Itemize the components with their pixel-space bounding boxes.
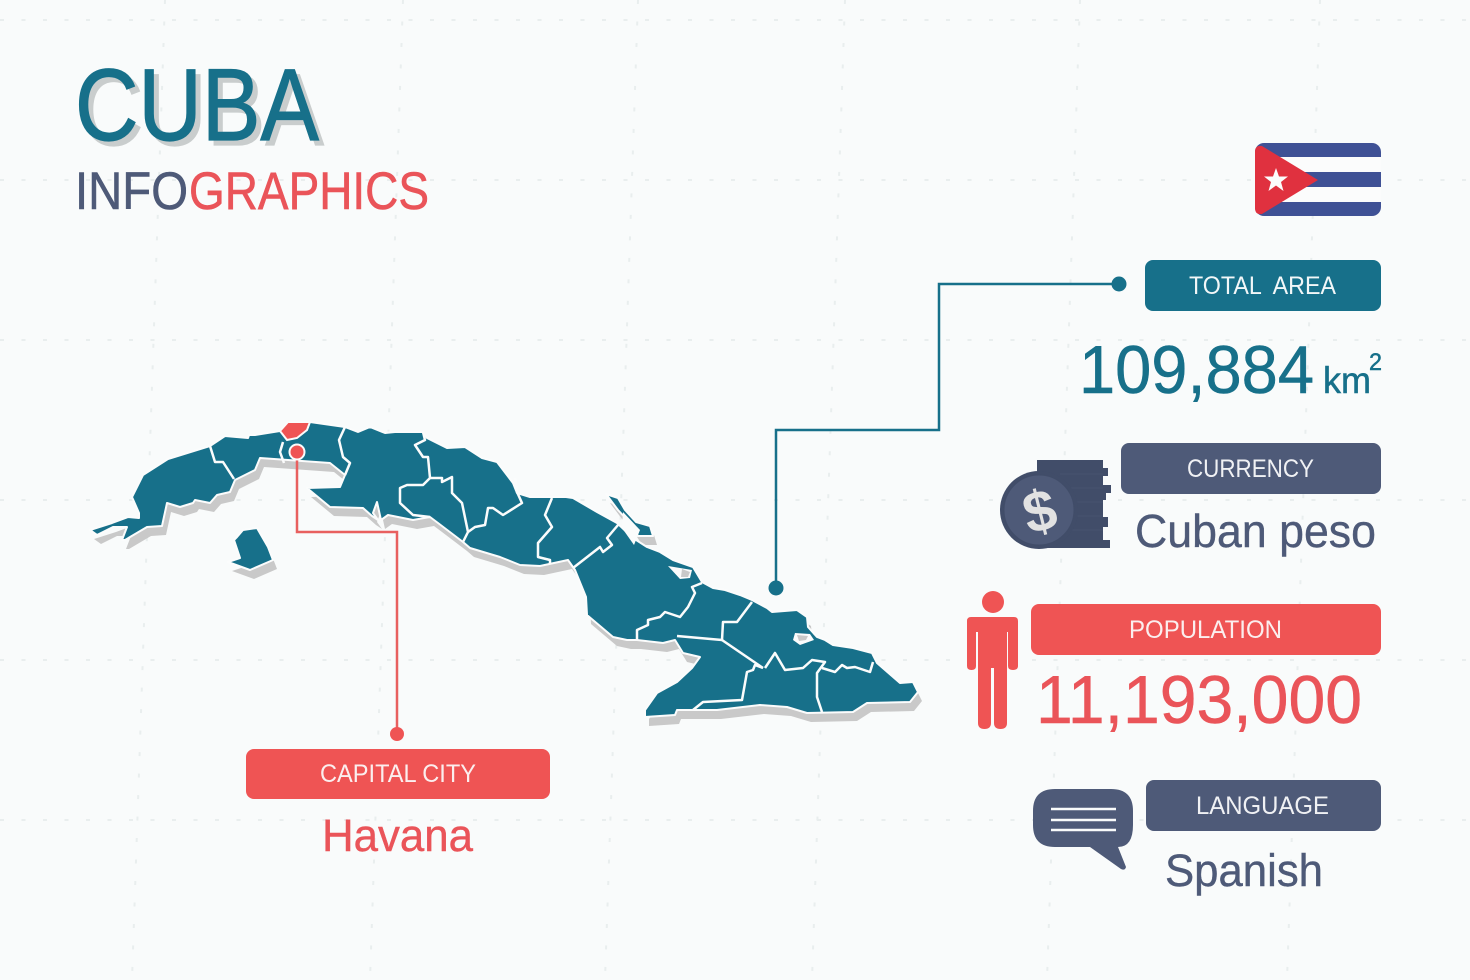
connector: capital city: [290, 444, 404, 741]
bays and coastal cut-outs: [622, 512, 814, 645]
value: total area: km: [1323, 360, 1371, 401]
connector: total area: [768, 276, 1126, 596]
label: currency: CURRENCY: [1187, 455, 1314, 483]
label: capital city: [246, 749, 550, 799]
value: population: 11,193,000: [1036, 662, 1362, 738]
map shadow: [94, 431, 922, 726]
label: currency: [1121, 443, 1381, 494]
icon: coins: [1000, 460, 1111, 549]
title: CUBA: CUBA: [80, 53, 324, 167]
map land: [90, 422, 918, 717]
value: Havana: Havana: [322, 810, 474, 861]
value: total area: 109,884: [1079, 332, 1314, 408]
province borders: [210, 427, 873, 712]
label: language: [1146, 780, 1381, 831]
label: total area: [1145, 260, 1381, 311]
icon: speech bubble: [1033, 789, 1133, 870]
title: CUBA: CUBA: [75, 48, 319, 162]
label: total area: TOTAL AREA: [1189, 272, 1336, 300]
icon: Cuban flag: [1255, 143, 1381, 216]
value: Cuban peso: Cuban peso: [1135, 505, 1376, 557]
icon: coins: $: [1016, 476, 1063, 547]
map of Cuba: [90, 422, 922, 726]
value: total area: 2: [1369, 349, 1382, 376]
label: population: [1031, 604, 1381, 655]
subtitle: INFOGRAPHICS: GRAPHICS: [189, 162, 429, 221]
label: population: POPULATION: [1129, 616, 1282, 644]
label: capital city: CAPITAL CITY: [320, 760, 476, 788]
icon: person: [967, 591, 1018, 729]
subtitle: INFOGRAPHICS: INFO: [75, 162, 188, 221]
value: Spanish: Spanish: [1165, 845, 1323, 896]
subtitle: INFOGRAPHICS: [75, 162, 429, 221]
Havana province: [280, 422, 310, 440]
label: language: LANGUAGE: [1196, 792, 1329, 820]
